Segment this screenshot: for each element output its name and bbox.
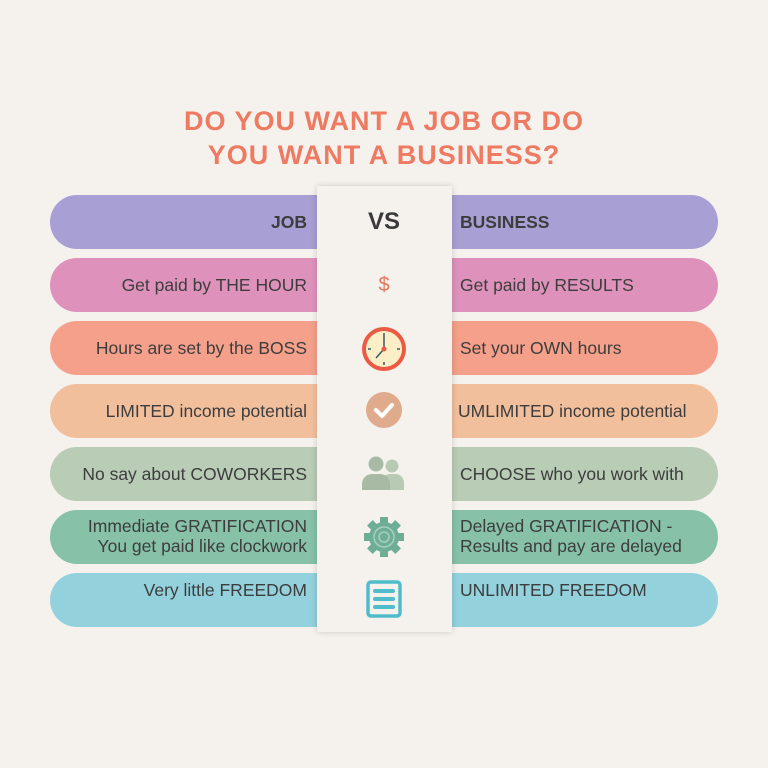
row: income right bbox=[452, 384, 718, 438]
row: gratification left: Immediate GRATIFICATION bbox=[88, 516, 307, 536]
row: freedom left: Very little FREEDOM bbox=[144, 580, 307, 600]
row: hours right: Set your OWN hours bbox=[460, 338, 621, 358]
icon: people bbox=[362, 456, 404, 490]
icon: clock bbox=[362, 327, 406, 371]
row: coworkers left bbox=[50, 447, 318, 501]
row: header left: JOB bbox=[271, 212, 307, 232]
row: header right: BUSINESS bbox=[460, 212, 549, 232]
row: gratification left: You get paid like clockwork bbox=[98, 536, 307, 556]
row: pay right: Get paid by RESULTS bbox=[460, 275, 634, 295]
row: income left bbox=[50, 384, 318, 438]
row: gratification right: Delayed GRATIFICATION - bbox=[460, 516, 672, 536]
title: YOU WANT A BUSINESS? bbox=[208, 140, 560, 170]
row: coworkers right bbox=[452, 447, 718, 501]
icon: dollar: $ bbox=[378, 274, 390, 296]
row: pay left bbox=[50, 258, 318, 312]
row: gratification left bbox=[50, 510, 318, 564]
row: income right: UMLIMITED income potential bbox=[458, 401, 687, 421]
icon: check bbox=[366, 392, 402, 428]
title: DO YOU WANT A JOB OR DO bbox=[184, 106, 584, 136]
row: freedom right bbox=[452, 573, 718, 627]
row: freedom left bbox=[50, 573, 318, 627]
row: hours left bbox=[50, 321, 318, 375]
row: coworkers right: CHOOSE who you work with bbox=[460, 464, 684, 484]
row: pay right bbox=[452, 258, 718, 312]
row: header left bbox=[50, 195, 318, 249]
row: gratification right bbox=[452, 510, 718, 564]
row: gratification right: Results and pay are delayed bbox=[460, 536, 682, 556]
vs label: VS bbox=[368, 208, 400, 235]
icon: gear bbox=[364, 517, 404, 557]
row: income left: LIMITED income potential bbox=[106, 401, 307, 421]
row: hours right bbox=[452, 321, 718, 375]
row: pay left: Get paid by THE HOUR bbox=[122, 275, 307, 295]
row: hours left: Hours are set by the BOSS bbox=[96, 338, 307, 358]
title bbox=[184, 106, 584, 170]
icon: list bbox=[366, 580, 402, 618]
row: freedom right: UNLIMITED FREEDOM bbox=[460, 580, 647, 600]
row: coworkers left: No say about COWORKERS bbox=[82, 464, 307, 484]
center column bbox=[317, 186, 452, 632]
row: header right bbox=[452, 195, 718, 249]
